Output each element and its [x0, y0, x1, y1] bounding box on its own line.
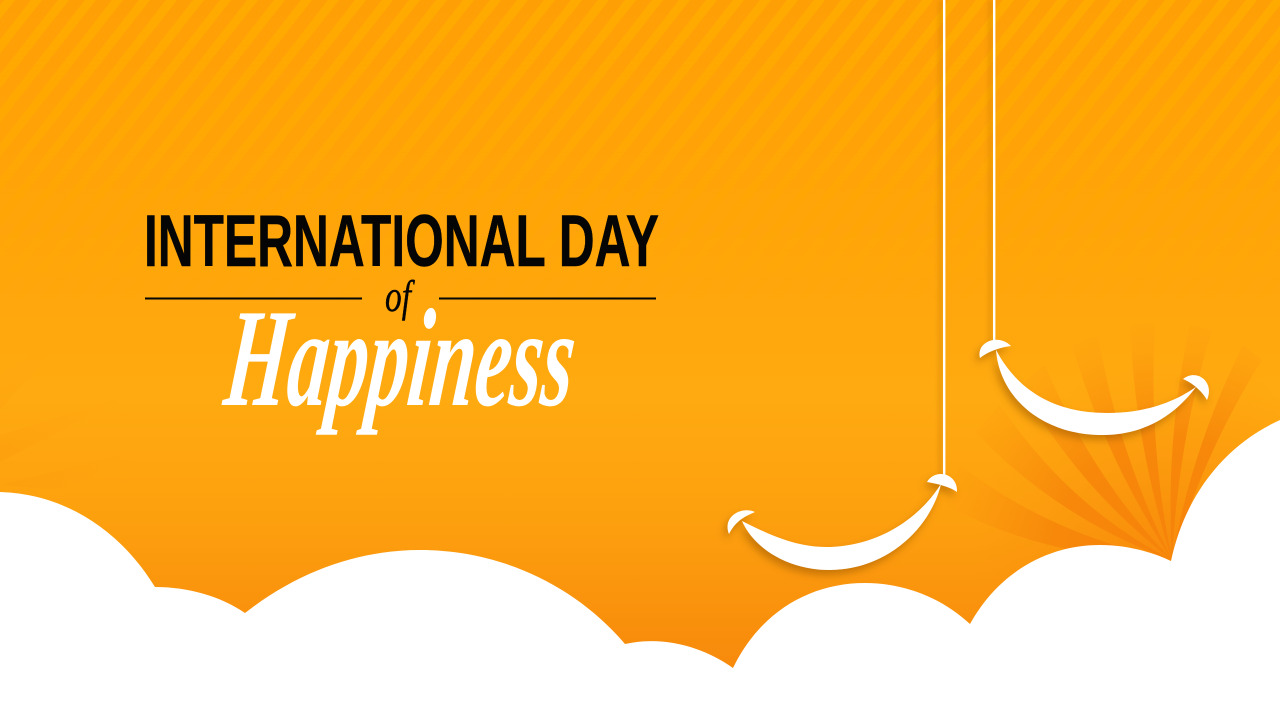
divider line right	[439, 298, 656, 300]
white clouds	[0, 420, 1280, 720]
diagonal stripe pattern	[0, 0, 1280, 69]
title block	[144, 201, 659, 436]
word: of: of	[385, 272, 415, 321]
smile right	[980, 340, 1209, 435]
sunburst rays behind the clouds	[945, 322, 1262, 560]
hanging string right	[993, 0, 995, 346]
hanging string left	[943, 0, 945, 480]
word: Happiness: Happiness	[218, 281, 583, 436]
smile left	[728, 474, 957, 570]
sunburst glow	[972, 360, 1280, 720]
heading: International Day: INTERNATIONAL DAY	[144, 201, 659, 282]
faint rays at left edge	[0, 330, 160, 490]
divider line left	[145, 298, 362, 300]
